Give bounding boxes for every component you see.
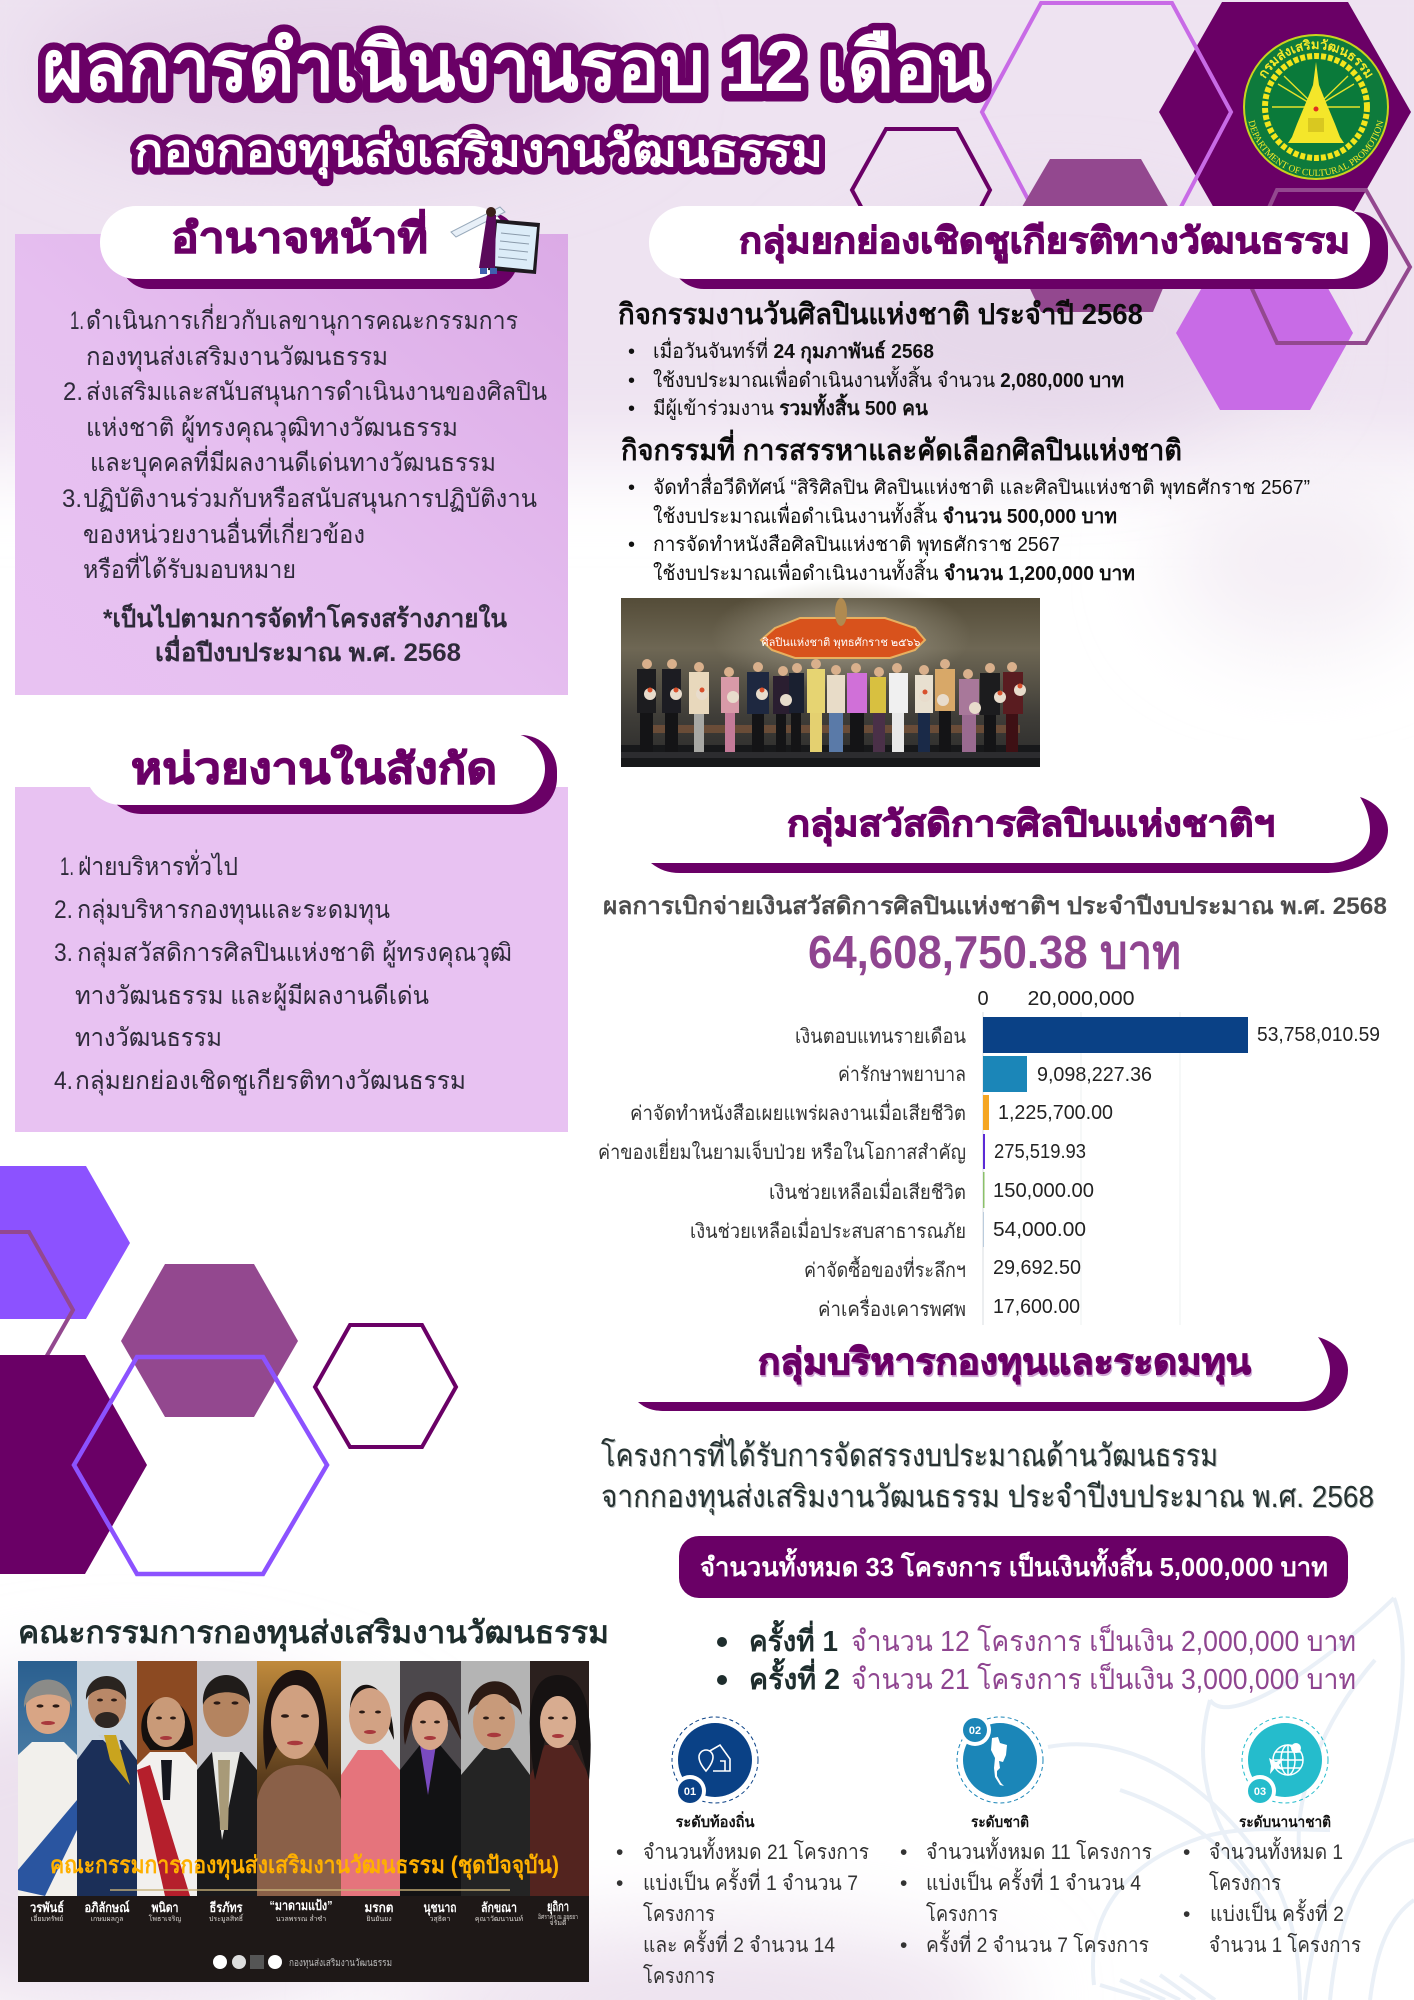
icon: thailand map: 02 — [969, 1725, 981, 1737]
panel: duties — [15, 206, 568, 695]
units list: ฝ่ายบริหารทั่วไป — [78, 849, 238, 881]
heading pill: units: หน่วยงานในสังกัด — [131, 744, 497, 792]
heading pill: units — [85, 733, 557, 814]
activity 2: • — [628, 534, 635, 556]
section pill: fund management group: กลุ่มบริหารกองทุนและระดมทุน — [758, 1341, 1251, 1385]
icon: globe and plane: 03 — [1254, 1786, 1266, 1798]
member surnames — [31, 1913, 578, 1927]
level 3: international: แบ่งเป็น ครั้งที่ 2 — [1210, 1899, 1344, 1926]
level 1: local: และ ครั้งที่ 2 จำนวน 14 — [643, 1930, 835, 1957]
ceremony attendees — [637, 659, 1026, 752]
member surnames: อิศราคุร ณ อยุธยา — [538, 1913, 578, 1921]
duties list: ส่งเสริมและสนับสนุนการดำเนินงานของศิลปิน — [86, 378, 547, 407]
member names: ธีรภัทร — [209, 1900, 243, 1915]
bar chart: 275,519.93 — [994, 1141, 1086, 1163]
bar chart: 20,000,000 — [1028, 988, 1134, 1010]
units list: 2. — [54, 896, 73, 924]
level 1: local — [616, 1717, 869, 1988]
level 3: international: จำนวน 1 โครงการ — [1209, 1933, 1361, 1957]
bar chart: ค่าจัดซื้อของที่ระลึกฯ — [804, 1256, 966, 1282]
member surnames: โพธาเจริญ — [149, 1914, 181, 1923]
level 1: local: โครงการ — [643, 1902, 715, 1926]
activity 1 — [618, 299, 1143, 421]
watermark: flower — [1048, 1598, 1414, 2000]
bar chart: เงินช่วยเหลือเมื่อเสียชีวิต — [769, 1178, 966, 1204]
duties list: หรือที่ได้รับมอบหมาย — [83, 552, 296, 584]
bar chart: 54,000.00 — [993, 1219, 1086, 1241]
member surnames: ประมูลสิทธิ์ — [209, 1913, 244, 1923]
photo: committee members — [18, 1661, 591, 1982]
units list: 3. — [54, 939, 73, 967]
social icons — [213, 1955, 392, 1969]
bar chart: ค่ารักษาพยาบาล — [838, 1064, 966, 1086]
level 1: local: จำนวนทั้งหมด 21 โครงการ — [643, 1837, 869, 1864]
bar chart: 150,000.00 — [993, 1180, 1094, 1202]
activity 2: กิจกรรมที่ การสรรหาและคัดเลือกศิลปินแห่งชาติ — [621, 429, 1182, 467]
activity 2: • — [628, 477, 635, 499]
activity 2 — [621, 429, 1310, 585]
duties list: ของหน่วยงานอื่นที่เกี่ยวข้อง — [83, 517, 365, 549]
rounds list — [717, 1619, 1356, 1696]
member names: นุชนาถ — [424, 1900, 457, 1916]
callout: total projects — [679, 1536, 1348, 1598]
activity 1: มีผู้เข้าร่วมงาน รวมทั้งสิ้น 500 คน — [653, 393, 928, 421]
activity 2: จัดทำสื่อวีดิทัศน์ “สิริศิลปิน ศิลปินแห่งชาติ และศิลปินแห่งชาติ พุทธศักราช 2567” — [653, 473, 1310, 500]
level 2: national — [900, 1714, 1152, 1957]
bar chart: ค่าของเยี่ยมในยามเจ็บป่วย หรือในโอกาสสำคัญ — [598, 1138, 966, 1164]
bar chart: ค่าจัดทำหนังสือเผยแพร่ผลงานเมื่อเสียชีวิต — [630, 1099, 966, 1125]
bar chart: 29,692.50 — [993, 1257, 1081, 1279]
member names: ลักขณา — [481, 1900, 517, 1915]
bar chart — [598, 988, 1380, 1325]
section pill: welfare group — [651, 797, 1388, 873]
member surnames: ยินยันยง — [366, 1915, 392, 1923]
rounds list: จำนวน 21 โครงการ เป็นเงิน 3,000,000 บาท — [851, 1661, 1356, 1696]
level 2: national: • — [900, 1872, 907, 1895]
activity 1: ใช้งบประมาณเพื่อดำเนินงานทั้งสิ้น จำนวน 2,080,000 บาท — [653, 366, 1124, 392]
rounds list: ครั้งที่ 2 — [749, 1657, 840, 1696]
activity 1: กิจกรรมงานวันศิลปินแห่งชาติ ประจำปี 2568 — [618, 299, 1143, 331]
section pill: welfare group: กลุ่มสวัสดิการศิลปินแห่งชาติฯ — [787, 803, 1275, 847]
note: *เป็นไปตามการจัดทำโครงสร้างภายใน — [103, 603, 507, 633]
member names: “มาดามแป้ง” — [270, 1898, 332, 1913]
duties list: 1. — [70, 307, 84, 335]
social icons: กองทุนส่งเสริมงานวัฒนธรรม — [289, 1958, 392, 1969]
icon: house and pin — [672, 1717, 758, 1807]
member names: ยุถิกา — [547, 1899, 569, 1915]
duties list: แห่งชาติ ผู้ทรงคุณวุฒิทางวัฒนธรรม — [86, 414, 458, 443]
subtitle: กองกองทุนส่งเสริมงานวัฒนธรรม — [134, 125, 823, 179]
duties list: ปฏิบัติงานร่วมกับหรือสนับสนุนการปฏิบัติงาน — [83, 485, 537, 514]
level 1: local: • — [616, 1872, 623, 1895]
units list: 1. — [60, 853, 74, 881]
member surnames: เอี่ยมทรัพย์ — [31, 1914, 63, 1923]
heading pill: duties: อำนาจหน้าที่ — [171, 209, 428, 261]
level 2: national: • — [900, 1934, 907, 1957]
units list — [54, 849, 512, 1096]
level 1: local: โครงการ — [643, 1964, 715, 1988]
level 3: international: ระดับนานาชาติ — [1239, 1813, 1331, 1831]
hexagon decoration: left — [0, 1166, 456, 1574]
activity 1: • — [628, 398, 635, 420]
title: ผลการดำเนินงานรอบ 12 เดือน — [42, 28, 985, 107]
section pill: fund management group — [638, 1337, 1348, 1411]
level 1: local: แบ่งเป็น ครั้งที่ 1 จำนวน 7 — [643, 1868, 858, 1895]
member surnames: จรัมดี — [549, 1919, 567, 1927]
units list: ทางวัฒนธรรม และผู้มีผลงานดีเด่น — [75, 982, 429, 1011]
activity 1: • — [628, 370, 635, 392]
activity 1: เมื่อวันจันทร์ที่ 24 กุมภาพันธ์ 2568 — [653, 337, 934, 364]
project intro text: โครงการที่ได้รับการจัดสรรงบประมาณด้านวัฒนธรรม — [601, 1434, 1218, 1473]
duties list: 2. — [63, 378, 83, 406]
level 3: international: จำนวนทั้งหมด 1 — [1209, 1837, 1343, 1864]
level 3: international: โครงการ — [1209, 1871, 1281, 1895]
logo: department of cultural promotion seal: กรมส่งเสริมวัฒนธรรม — [1260, 38, 1373, 78]
units list: กลุ่มบริหารกองทุนและระดมทุน — [77, 896, 390, 925]
activity 2: ใช้งบประมาณเพื่อดำเนินงานทั้งสิ้น จำนวน 1,200,000 บาท — [653, 559, 1135, 585]
units list: กลุ่มยกย่องเชิดชูเกียรติทางวัฒนธรรม — [75, 1067, 466, 1096]
hexagon decoration: top right — [852, 2, 1411, 410]
level 2: national: โครงการ — [926, 1902, 998, 1926]
photo: national artists ceremony: ศิลปินแห่งชาติ พุทธศักราช ๒๕๖๖ — [762, 637, 920, 649]
member surnames: คุณาวัฒนานนท์ — [475, 1915, 524, 1923]
committee heading: คณะกรรมการกองทุนส่งเสริมงานวัฒนธรรม — [18, 1615, 609, 1652]
bar chart: 9,098,227.36 — [1037, 1064, 1152, 1086]
welfare heading: ผลการเบิกจ่ายเงินสวัสดิการศิลปินแห่งชาติฯ ประจำปีงบประมาณ พ.ศ. 2568 — [603, 893, 1387, 920]
rounds list: ครั้งที่ 1 — [749, 1619, 838, 1658]
photo: national artists ceremony — [621, 580, 1040, 767]
duties list: ดำเนินการเกี่ยวกับเลขานุการคณะกรรมการ — [86, 303, 518, 336]
icon: thailand map — [957, 1714, 1043, 1803]
logo: department of cultural promotion seal — [1243, 34, 1389, 180]
member names: พนิดา — [152, 1900, 178, 1915]
duties list — [62, 303, 547, 584]
icon: globe and plane — [1242, 1717, 1328, 1807]
section pill: honor group — [649, 206, 1388, 289]
activity 2: ใช้งบประมาณเพื่อดำเนินงานทั้งสิ้น จำนวน 500,000 บาท — [653, 502, 1117, 528]
units list: 4. — [54, 1067, 73, 1095]
duties list: 3. — [62, 485, 82, 513]
member surnames: วสุธิดา — [430, 1915, 451, 1923]
duties list: กองทุนส่งเสริมงานวัฒนธรรม — [86, 343, 388, 372]
bar chart: 53,758,010.59 — [1257, 1024, 1380, 1046]
level 2: national: แบ่งเป็น ครั้งที่ 1 จำนวน 4 — [926, 1868, 1141, 1895]
icon: house and pin: 01 — [684, 1786, 696, 1798]
level 3: international — [1183, 1717, 1361, 1957]
duties list: และบุคคลที่มีผลงานดีเด่นทางวัฒนธรรม — [90, 445, 496, 478]
note: เมื่อปีงบประมาณ พ.ศ. 2568 — [155, 635, 461, 667]
bar chart: เงินช่วยเหลือเมื่อประสบสาธารณภัย — [690, 1217, 966, 1243]
project intro text — [601, 1434, 1374, 1516]
units list: กลุ่มสวัสดิการศิลปินแห่งชาติ ผู้ทรงคุณวุฒิ — [77, 939, 512, 968]
level 1: local: • — [616, 1841, 623, 1864]
panel: units — [15, 733, 568, 1132]
level 1: local: ระดับท้องถิ่น — [676, 1811, 755, 1831]
section pill: honor group: กลุ่มยกย่องเชิดชูเกียรติทางวัฒนธรรม — [739, 220, 1350, 264]
member names: วรพันธ์ — [30, 1900, 64, 1915]
units list: ทางวัฒนธรรม — [75, 1024, 222, 1052]
member names: อภิลักษณ์ — [84, 1900, 130, 1915]
level 2: national: ระดับชาติ — [971, 1813, 1029, 1831]
level 3: international: • — [1183, 1841, 1190, 1864]
bar chart: 1,225,700.00 — [998, 1102, 1113, 1124]
heading pill: duties — [100, 206, 518, 289]
member names — [30, 1898, 569, 1916]
level 3: international: • — [1183, 1903, 1190, 1926]
rounds list: จำนวน 12 โครงการ เป็นเงิน 2,000,000 บาท — [851, 1623, 1356, 1658]
bar chart: ค่าเครื่องเคารพศพ — [818, 1295, 966, 1321]
member surnames: เกษมผลกูล — [91, 1916, 123, 1923]
logo: department of cultural promotion seal: DEPARTMENT OF CULTURAL PROMOTION — [1248, 120, 1384, 176]
callout: total projects: จำนวนทั้งหมด 33 โครงการ เป็นเงินทั้งสิ้น 5,000,000 บาท — [700, 1547, 1328, 1582]
activity 1: • — [628, 341, 635, 363]
bar chart: เงินตอบแทนรายเดือน — [795, 1026, 966, 1048]
icon: person with clipboard — [451, 207, 540, 274]
member surnames: นวลพรรณ ล่ำซำ — [276, 1914, 326, 1923]
bar chart: 0 — [977, 988, 989, 1010]
note — [103, 603, 507, 667]
level 2: national: ครั้งที่ 2 จำนวน 7 โครงการ — [926, 1930, 1149, 1957]
welfare total: 64,608,750.38 บาท — [808, 926, 1181, 978]
activity 2: การจัดทำหนังสือศิลปินแห่งชาติ พุทธศักราช 2567 — [653, 534, 1060, 557]
photo: committee members: คณะกรรมการกองทุนส่งเสริมงานวัฒนธรรม (ชุดปัจจุบัน) — [50, 1852, 559, 1881]
bar chart: 17,600.00 — [993, 1296, 1080, 1318]
members — [18, 1670, 591, 1896]
level 2: national: • — [900, 1841, 907, 1864]
level 2: national: จำนวนทั้งหมด 11 โครงการ — [926, 1837, 1152, 1864]
member names: มรกต — [364, 1900, 394, 1915]
